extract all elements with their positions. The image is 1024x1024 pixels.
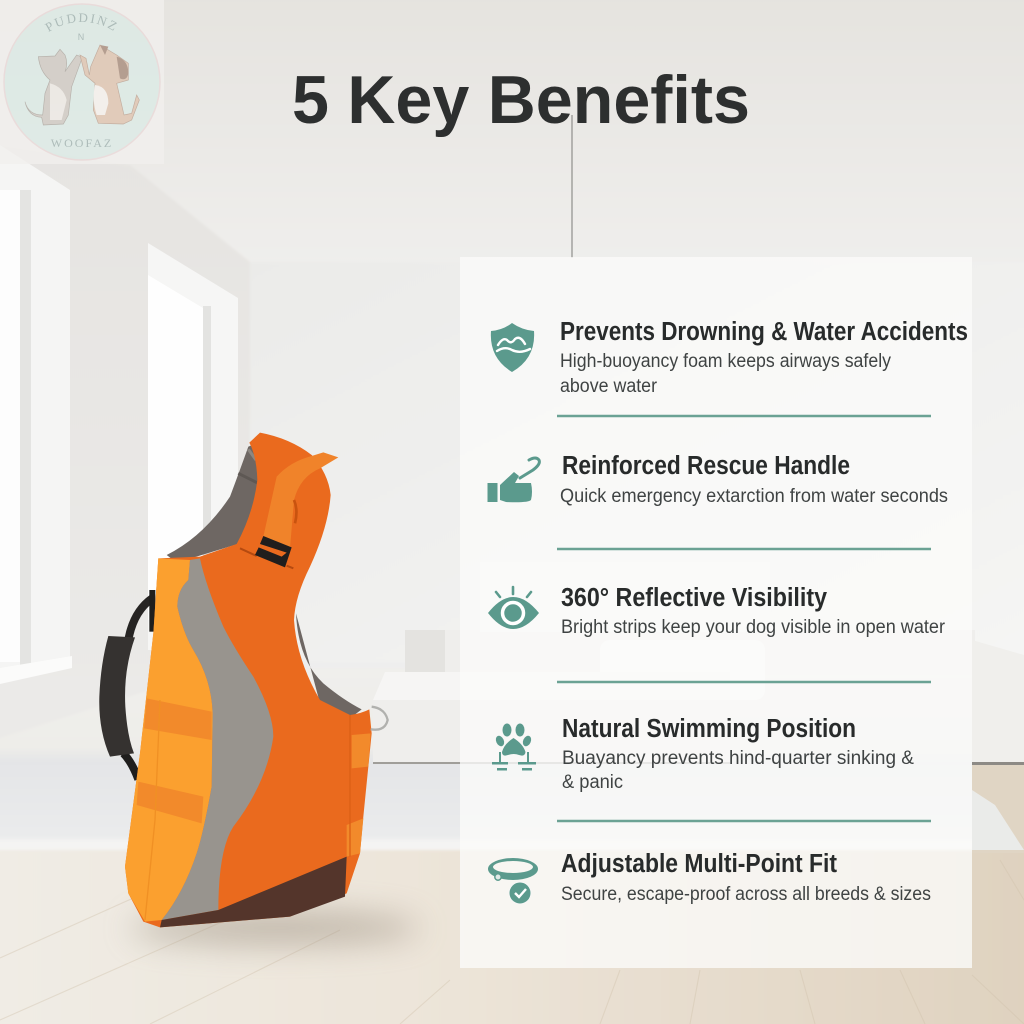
ceiling cord xyxy=(571,115,573,258)
logo wordmark xyxy=(44,13,117,150)
logo wordmark: WOOFAZ xyxy=(51,136,113,150)
benefit 5 xyxy=(488,850,931,905)
description: High-buoyancy foam keeps airways safely xyxy=(560,351,891,372)
heading: Reinforced Rescue Handle xyxy=(562,452,850,480)
description: Buayancy prevents hind-quarter sinking & xyxy=(562,748,914,769)
right window xyxy=(148,243,238,650)
heading: 360° Reflective Visibility xyxy=(561,584,828,612)
vest handle xyxy=(99,590,155,779)
heading: Natural Swimming Position xyxy=(562,715,856,743)
logo badge xyxy=(0,0,164,164)
description: Quick emergency extarction from water seconds xyxy=(560,486,948,507)
benefit 1 xyxy=(491,318,968,397)
description: above water xyxy=(560,376,658,397)
logo wordmark: N xyxy=(78,32,86,42)
vest seams and darker hood shade xyxy=(145,500,350,920)
icon: hand holding hook xyxy=(488,458,539,502)
title: 5 Key Benefits xyxy=(292,62,750,138)
vest light orange panel xyxy=(125,558,213,922)
vest gray lining xyxy=(167,443,362,718)
benefits panel xyxy=(460,257,972,968)
description: Secure, escape-proof across all breeds & sizes xyxy=(561,884,931,905)
benefit 2 xyxy=(488,452,948,507)
left window xyxy=(0,145,72,684)
vest main orange body xyxy=(125,433,372,927)
icon: paw over water level xyxy=(492,724,536,770)
benefit 4 xyxy=(492,715,914,793)
description: & panic xyxy=(562,772,623,793)
icon: collar with check xyxy=(488,858,538,904)
description xyxy=(562,748,914,793)
vest product image xyxy=(99,433,388,927)
description xyxy=(560,351,891,397)
heading: Adjustable Multi-Point Fit xyxy=(561,850,837,878)
floor boards xyxy=(0,860,1024,1024)
logo wordmark: PUDDINZ xyxy=(44,13,117,32)
vest webbing straps xyxy=(137,452,371,857)
icon: eye xyxy=(488,587,539,629)
vest reflective stripe xyxy=(162,558,273,920)
description: Bright strips keep your dog visible in open water xyxy=(561,617,946,638)
logo illustration: cat and dog high five xyxy=(25,45,139,125)
benefit 3 xyxy=(488,584,946,638)
heading: Prevents Drowning & Water Accidents xyxy=(560,318,968,346)
icon: shield with waves xyxy=(491,323,534,372)
vest brown base xyxy=(160,857,347,927)
vest D-ring xyxy=(371,707,388,730)
sofa and table xyxy=(373,562,1024,853)
vest buckle xyxy=(255,536,292,567)
